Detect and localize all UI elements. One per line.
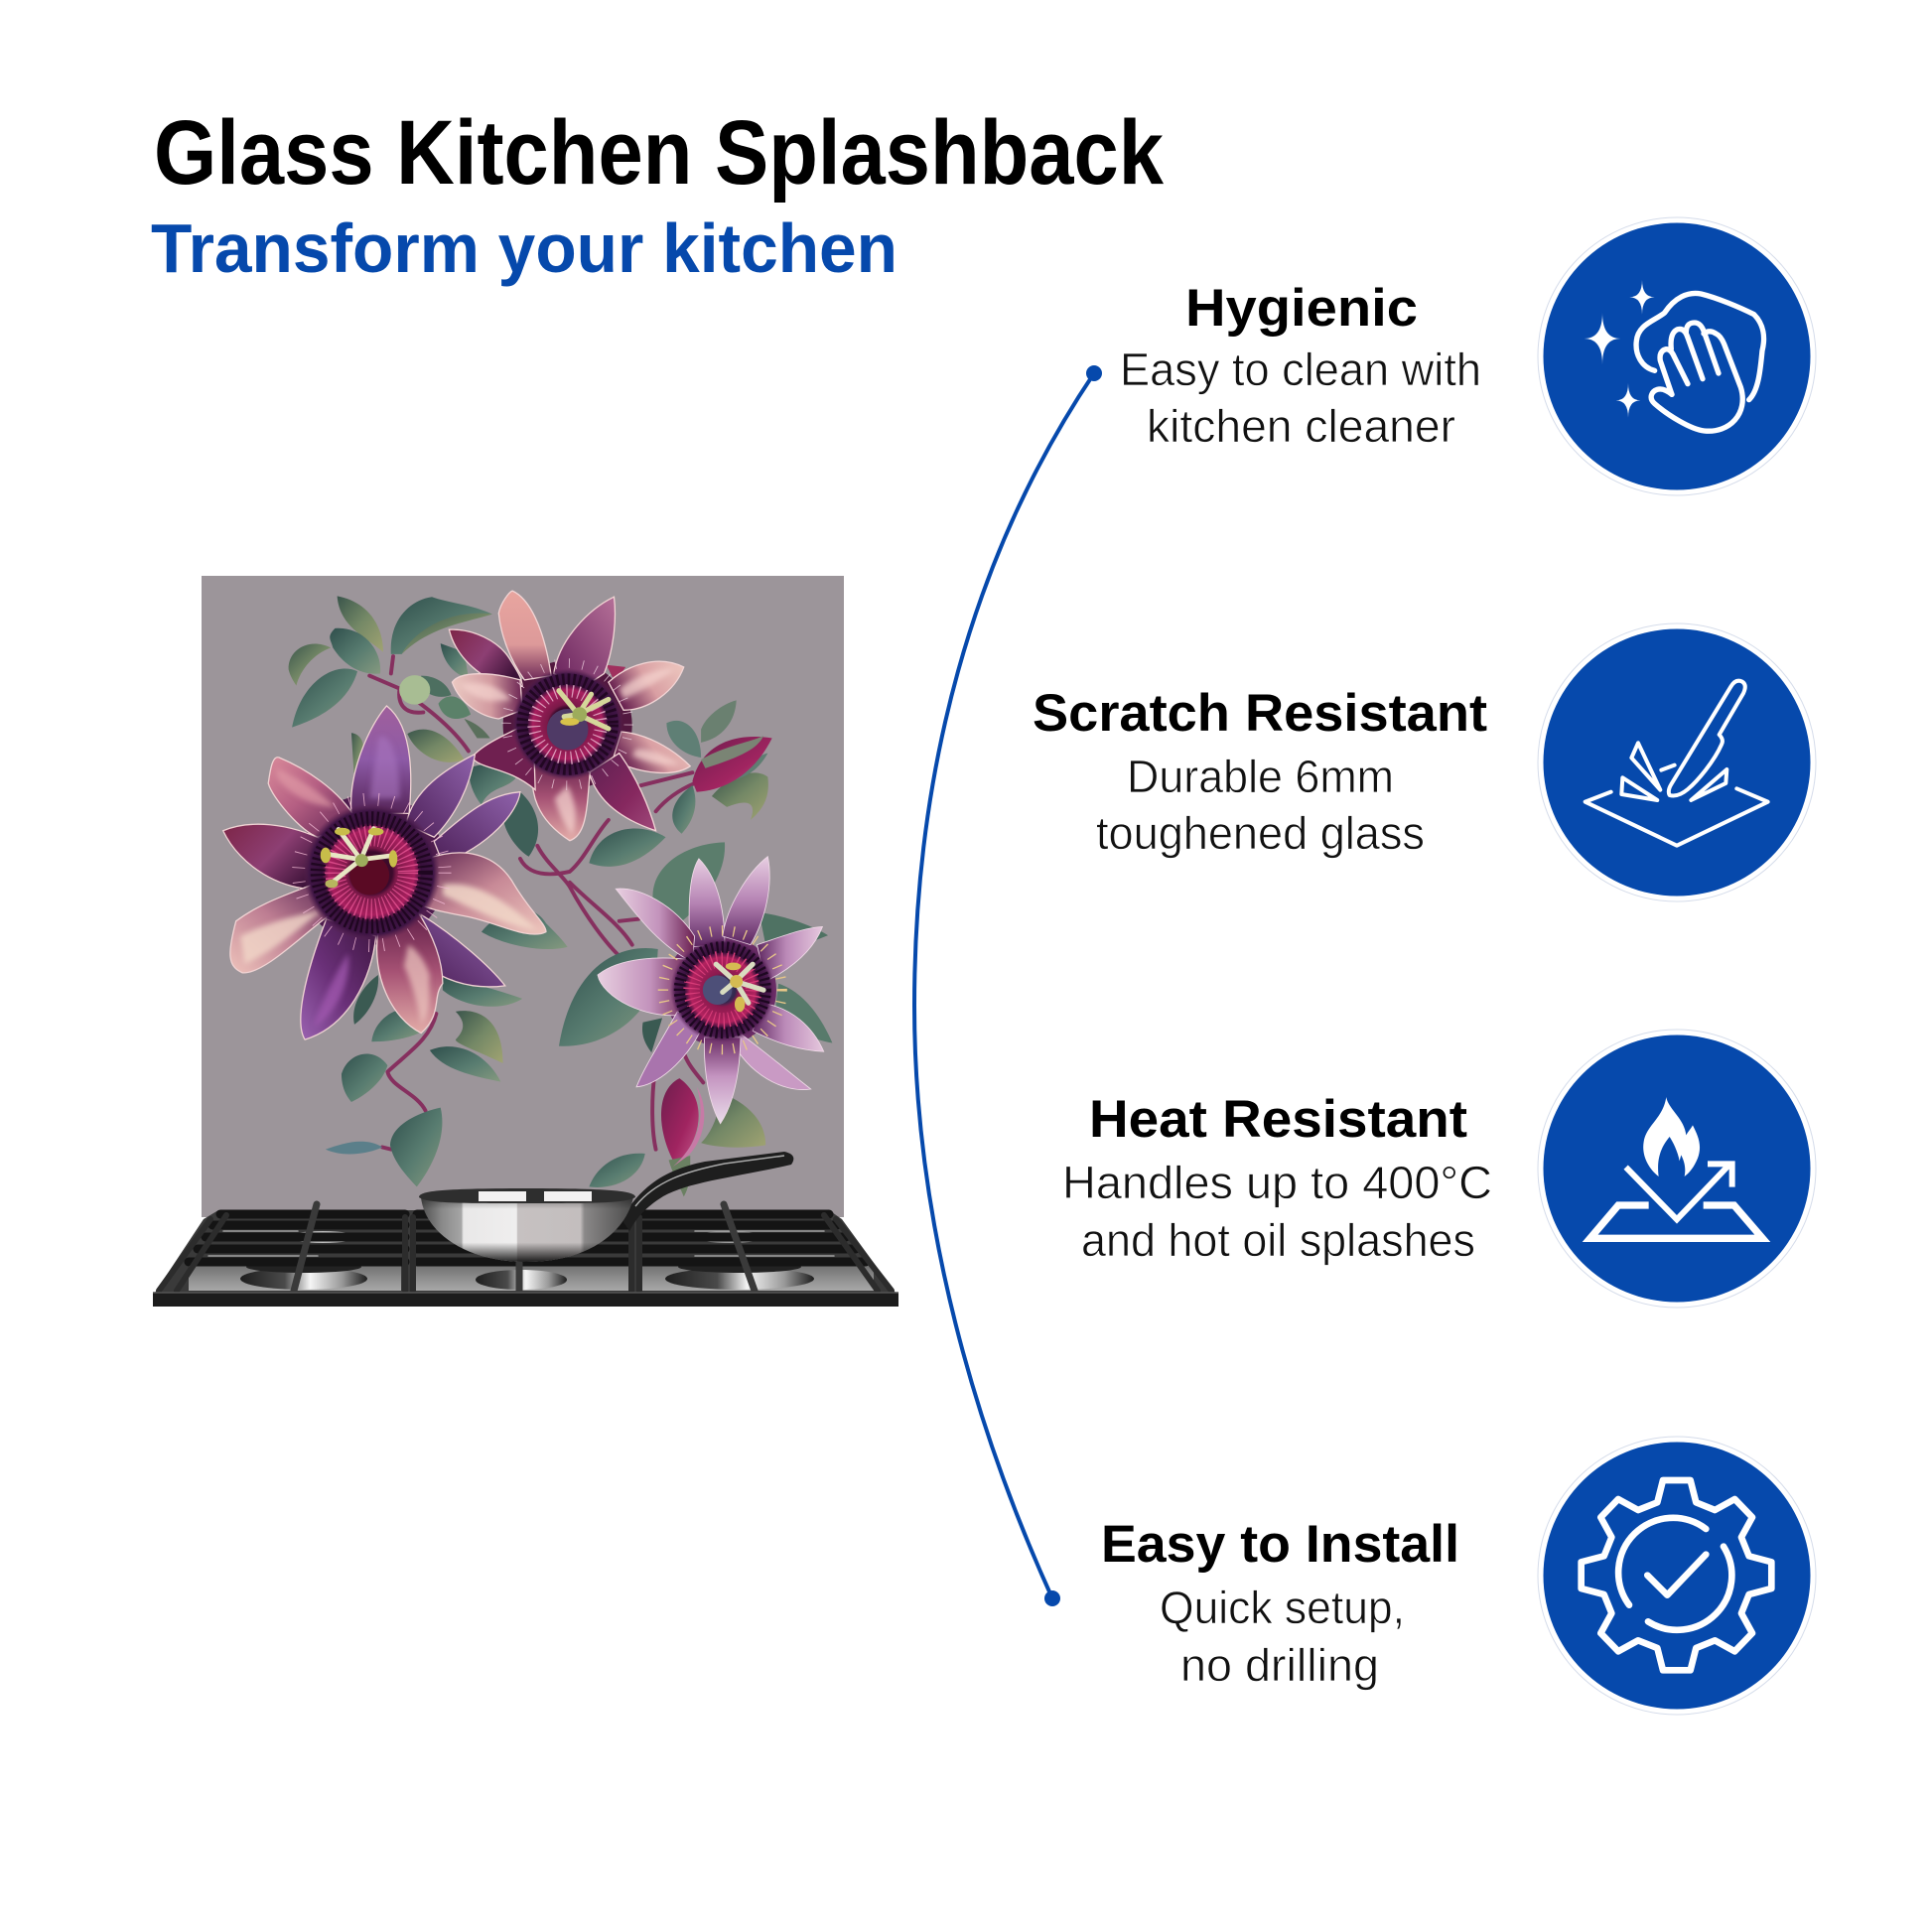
frying pan xyxy=(419,1152,793,1262)
flower: large highlights xyxy=(240,737,537,1027)
connector curve xyxy=(914,365,1102,1606)
flower: large xyxy=(223,706,546,1039)
feature: scratch resistant xyxy=(1033,684,1487,859)
icon: hand wiping xyxy=(1538,217,1816,495)
heading: easy to install: Easy to Install xyxy=(1101,1515,1459,1574)
description: hygienic: kitchen cleaner xyxy=(1147,400,1455,452)
floral artwork xyxy=(223,591,832,1196)
flower: upper xyxy=(449,591,690,841)
description: scratch resistant: toughened glass xyxy=(1096,807,1425,859)
icon: gear with check xyxy=(1538,1437,1816,1715)
splashback panel xyxy=(202,576,844,1217)
hob grates xyxy=(159,1204,892,1291)
flower: upper highlights xyxy=(460,669,679,835)
flower: large centre xyxy=(299,799,445,946)
description: scratch resistant xyxy=(1096,751,1425,859)
burner wells xyxy=(189,1265,874,1291)
flower: lower right xyxy=(598,857,824,1124)
subtitle: Transform your kitchen xyxy=(151,209,897,287)
burners xyxy=(240,1231,814,1290)
feature: easy to install xyxy=(1101,1515,1459,1691)
feature: heat resistant xyxy=(1062,1090,1492,1266)
hob frame xyxy=(155,1210,896,1293)
description: easy to install: Quick setup, xyxy=(1160,1582,1405,1633)
heading: hygienic: Hygienic xyxy=(1185,279,1418,338)
pan handle xyxy=(621,1152,793,1231)
description: heat resistant: and hot oil splashes xyxy=(1081,1214,1475,1266)
description: heat resistant xyxy=(1062,1157,1492,1266)
description: heat resistant: Handles up to 400°C xyxy=(1062,1157,1492,1208)
heading: heat resistant: Heat Resistant xyxy=(1089,1090,1467,1149)
icon: flame and heat xyxy=(1538,1030,1816,1308)
icon: knife on glass xyxy=(1538,623,1816,901)
buds xyxy=(399,675,772,1196)
description: easy to install xyxy=(1160,1582,1405,1691)
title: Glass Kitchen Splashback xyxy=(154,102,1165,204)
heading: scratch resistant: Scratch Resistant xyxy=(1033,684,1487,743)
gas hob xyxy=(153,1204,898,1307)
stems xyxy=(369,656,703,1150)
description: scratch resistant: Durable 6mm xyxy=(1127,751,1394,802)
leaves xyxy=(289,596,832,1187)
flower: upper centre xyxy=(506,663,628,785)
hob front lip xyxy=(153,1293,898,1307)
description: easy to install: no drilling xyxy=(1180,1639,1379,1691)
feature: hygienic xyxy=(1120,279,1481,452)
flower: lower right centre xyxy=(663,930,782,1049)
description: hygienic xyxy=(1120,344,1481,452)
pan rim xyxy=(419,1188,635,1203)
pan body xyxy=(421,1197,633,1262)
description: hygienic: Easy to clean with xyxy=(1120,344,1481,395)
